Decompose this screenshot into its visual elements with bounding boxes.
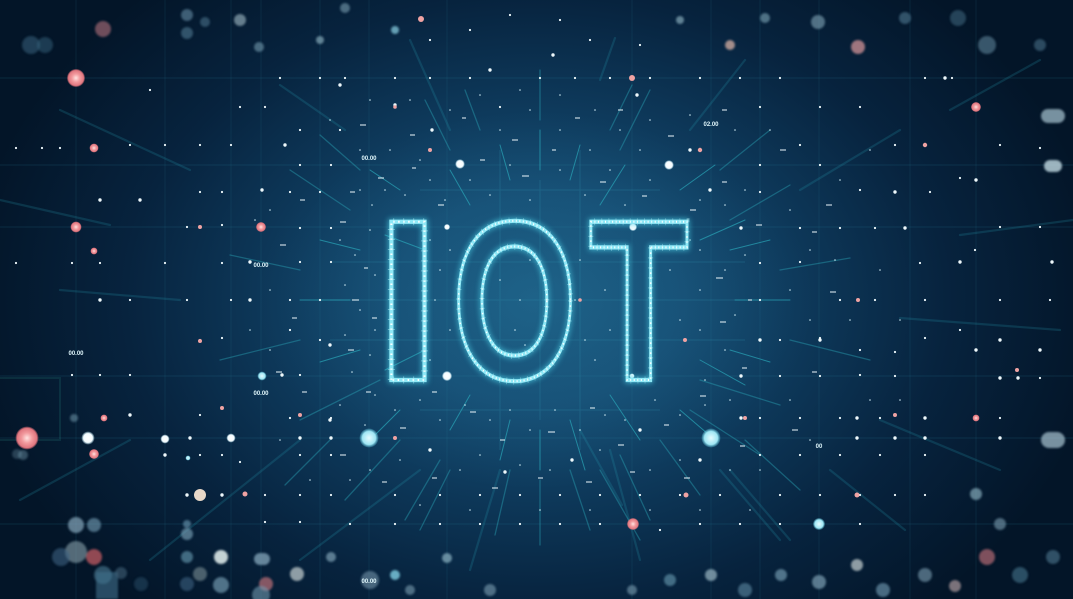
small data labels: 02.00 [703,122,719,128]
letter outlines: O [452,174,577,427]
small pink data points [198,16,1019,498]
letter particle sparkle: I [376,172,440,429]
letter particle sparkle [376,172,689,430]
small data labels: 00 [816,444,823,450]
small data labels [68,122,823,585]
dense short data ticks [276,110,836,488]
letter halo glow: T [589,172,689,430]
letter scattered particle fringe [376,172,689,430]
letter scattered particle fringe: T [589,172,689,430]
large glowing nodes [16,69,981,530]
letter outlines [376,172,689,430]
letter outlines: T [589,172,689,430]
small data labels: 00.00 [361,579,377,585]
title: IOT glowing letters [376,172,689,430]
letter halo glow [376,172,689,430]
letter scattered particle fringe: O [452,174,577,427]
letter halo glow: I [376,172,440,429]
letter particle sparkle: T [589,172,689,430]
small data labels: 00.00 [253,391,269,397]
small data labels: 00.00 [361,156,377,162]
central glow behind letters [256,110,816,490]
letter particle sparkle: O [452,174,577,427]
small data labels: 00.00 [253,263,269,269]
letter halo glow: O [452,174,577,427]
letter scattered particle fringe: I [376,172,440,429]
small data labels: 00.00 [68,351,84,357]
letter outlines: I [376,172,440,429]
